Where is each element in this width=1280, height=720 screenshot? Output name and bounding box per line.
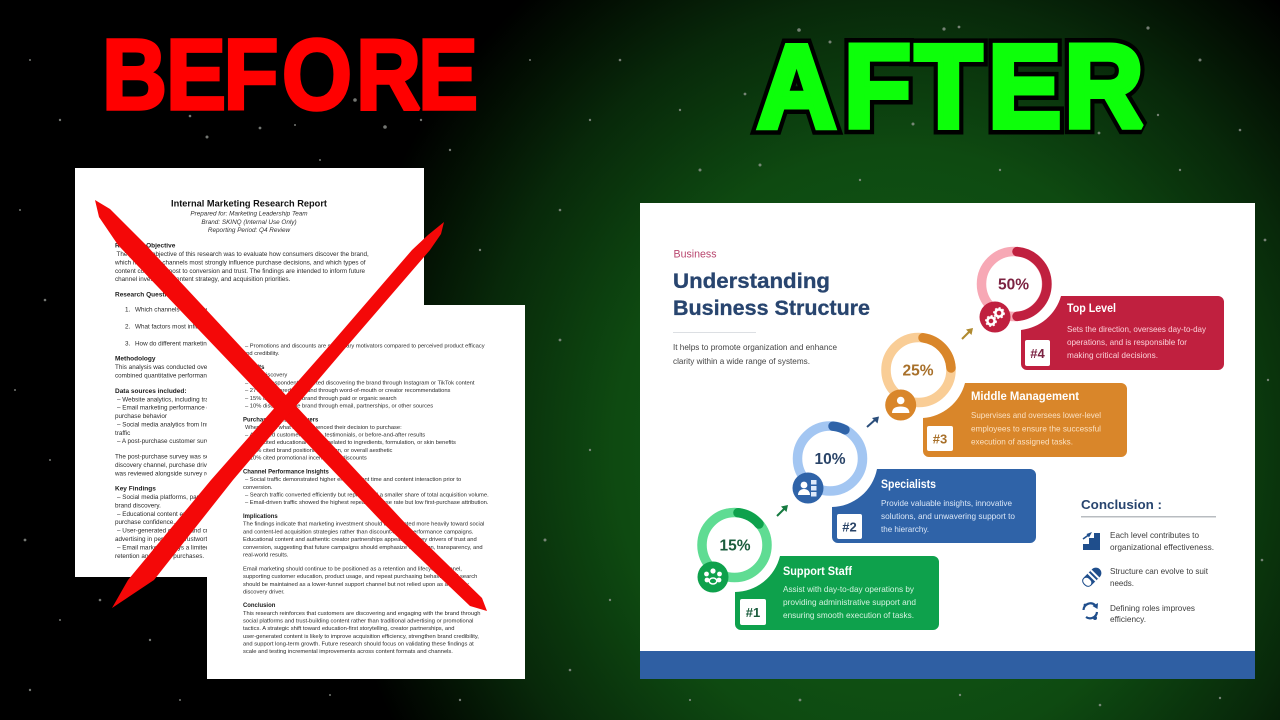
report findings text: – Social traffic demonstrated higher engagement time and content interaction prior to (245, 477, 461, 483)
percentage: 25% (902, 362, 934, 380)
conclusion heading: Conclusion : (1081, 497, 1162, 512)
rank badge (740, 599, 766, 625)
heading: AFTER: AFTER (757, 21, 1144, 153)
report objective and methodology text: advertising in perceived trustwort (115, 536, 208, 543)
heading: AFTER: AFTER (757, 21, 1144, 153)
card description (783, 584, 916, 620)
report conclusion text: scale and testing incremental improvements across content formats and channels. (243, 649, 453, 655)
ring chart (886, 338, 951, 402)
report objective and methodology text: – Educational content expe (117, 511, 194, 518)
report conclusion text (243, 603, 480, 655)
rank badge: #4 (1030, 346, 1045, 361)
card description (971, 410, 1101, 446)
report findings text: – 10% cited promotional incentives or discounts (245, 456, 367, 462)
report objective and methodology text: purchase behavior (115, 413, 167, 420)
report objective and methodology text: – Social media platforms, partic (117, 494, 205, 501)
category label: Business (674, 248, 717, 260)
report objective and methodology text: – Website analytics, including tra (117, 396, 209, 404)
card description: ensuring smooth execution of tasks. (783, 610, 914, 620)
report implications text: real-world results. (243, 552, 289, 558)
report objective and methodology text: purchase confidence. (115, 519, 175, 526)
report objective and methodology text: Key Findings (115, 486, 156, 492)
conclusion item 1 (1110, 530, 1214, 552)
report objective and methodology text: This analysis was conducted ove (115, 364, 208, 371)
report subtitle: Brand: SKINQ (Internal Use Only) (201, 219, 297, 226)
report objective and methodology text: discovery channel, purchase driv (115, 462, 208, 469)
report subtitle: Prepared for: Marketing Leadership Team (190, 210, 308, 218)
report findings text: – 32% cited educational content related to ingredients, formulation, or skin benefits (245, 440, 456, 446)
report findings text: and credibility. (243, 351, 280, 357)
icon: team (698, 562, 728, 592)
conclusion item 3: efficiency. (1110, 614, 1146, 624)
report conclusion text: This research reinforces that customers are discovering and engaging with the brand through (243, 611, 480, 617)
report objective and methodology text: retention and repeat purchases. (115, 553, 204, 560)
report findings text: – Promotions and discounts are secondary motivators compared to perceived product efficacy (245, 344, 485, 350)
report objective and methodology text: was reviewed alongside survey re (114, 470, 210, 478)
report objective and methodology text: – Email marketing plays a limited (117, 544, 210, 552)
card description: making critical decisions. (1067, 350, 1158, 360)
heading: BEFORE: BEFORE (102, 20, 478, 131)
report objective and methodology text: – A post-purchase customer surv (117, 438, 210, 445)
arrow: level 1 to 2 (777, 505, 788, 516)
card (1021, 296, 1224, 370)
card description: operations, and is responsible for (1067, 337, 1187, 347)
report objective and methodology text: combined quantitative performan (115, 372, 207, 380)
report objective and methodology text: brand discovery. (115, 502, 161, 510)
report objective and methodology text: The post-purchase survey was se (115, 454, 210, 460)
rank badge: #3 (933, 432, 947, 446)
card description: Supervises and oversees lower-level (971, 410, 1101, 420)
report objective and methodology text: – User-generated content and cr (117, 528, 208, 534)
report conclusion text: social platforms and trust-building content rather than traditional advertising or promotional (243, 618, 473, 624)
report objective and methodology text: Research Questions (115, 292, 178, 298)
card title: Top Level (1067, 303, 1116, 315)
report findings text: – 47% of respondents reported discovering the brand through Instagram or TikTok content (245, 380, 475, 386)
card title: Support Staff (783, 566, 852, 578)
report implications text: conversion, suggesting that future campaigns should emphasize education, transparency, and (243, 545, 483, 551)
icon: manager (885, 390, 916, 420)
card description: the hierarchy. (881, 524, 929, 534)
rank badge: #1 (746, 605, 760, 620)
level 4: top level (980, 252, 1224, 370)
report implications text: and content-led acquisition strategies rather than discount-driven performance campaigns. (243, 530, 474, 536)
card title: Middle Management (971, 391, 1079, 403)
ring chart (702, 512, 767, 578)
intro text: clarity within a wide range of systems. (673, 356, 810, 366)
level 2: specialists (792, 426, 1036, 543)
report objective and methodology text: Methodology (115, 356, 156, 362)
report findings text: – 17% cited brand positioning, design, or overall aesthetic (245, 448, 393, 454)
conclusion panel (1080, 497, 1216, 624)
report findings text: – 41% cited customer reviews, testimonials, or before-and-after results (245, 432, 425, 438)
report findings text: Brand Discovery (245, 372, 287, 378)
report conclusion text: user-generated content is likely to improve acquisition efficiency, strengthen brand credibility, (243, 634, 479, 640)
report implications text: Implications (243, 514, 278, 520)
report objective and methodology text: – Social media analytics from Ins (117, 422, 209, 428)
card description: execution of assigned tasks. (971, 436, 1073, 446)
report objective and methodology text: Which channels drive most (135, 306, 211, 314)
panel: report page 1 (75, 168, 424, 577)
report findings text: When asked what most influenced their decision to purchase: (245, 425, 402, 431)
card (923, 383, 1127, 457)
card description (881, 498, 1015, 534)
title (673, 270, 870, 320)
conclusion item 2 (1110, 566, 1209, 588)
report findings text: Channel Performance Insights (243, 470, 329, 476)
rank badge: #2 (842, 520, 857, 534)
level 1: support staff (698, 512, 939, 630)
report findings text: – 10% discovered the brand through email, partnerships, or other sources (245, 404, 433, 410)
report findings text: – 15% discovered the brand through paid or organic search (245, 396, 397, 402)
report objective and methodology text (114, 242, 369, 560)
icon: specialist (792, 472, 824, 504)
report objective and methodology text: How do different marketin (135, 340, 207, 348)
icon: stairs (1083, 532, 1100, 550)
report title: Internal Marketing Research Report (171, 198, 327, 208)
report objective and methodology text: channel investment, content strategy, and acquisition priorities. (115, 276, 291, 283)
card description: Provide valuable insights, innovative (881, 498, 1012, 508)
conclusion item 2: needs. (1110, 578, 1134, 588)
report findings text (243, 344, 489, 506)
conclusion item 3 (1110, 603, 1195, 624)
report findings text: – Email-driven traffic showed the highest repeat purchase rate but low first-purchase attribution. (245, 500, 489, 506)
report objective and methodology text: 3. (125, 340, 131, 348)
report implications text: discovery driver. (243, 590, 285, 596)
report objective and methodology text: 2. (125, 324, 131, 330)
ring chart (798, 426, 862, 491)
report findings text: – 27% discovered the brand through word-of-mouth or creator recommendations (245, 388, 451, 394)
report objective and methodology text: which marketing channels most strongly influence purchase decisions, and which types of (114, 260, 366, 266)
icon: cycle (1084, 603, 1098, 620)
rank badge (1025, 340, 1050, 366)
icon: gears (980, 302, 1010, 332)
conclusion item 3: Defining roles improves (1110, 603, 1195, 613)
intro text: It helps to promote organization and enhance (673, 342, 837, 352)
title: Understanding (673, 270, 830, 293)
report implications text: Email marketing should continue to be positioned as a retention and lifecycle channel, (243, 566, 462, 572)
report conclusion text: tactics. A strategic shift toward education-first storytelling, creator partnerships, and (243, 626, 455, 632)
card description: employees to ensure the successful (971, 424, 1101, 434)
conclusion item 1: organizational effectiveness. (1110, 542, 1214, 552)
report implications text: The findings indicate that marketing investment should be allocated more heavily toward social (243, 522, 484, 528)
report findings text: – Search traffic converted efficiently but represented a smaller share of total acquisition volume. (245, 492, 489, 498)
arrow: level 3 to 4 (962, 328, 973, 339)
report conclusion text: and support long-term growth. Future research should focus on validating these findings at (243, 642, 474, 648)
card (735, 556, 939, 630)
report objective and methodology text: The primary objective of this research was to evaluate how consumers discover the brand, (116, 251, 369, 258)
rank badge (927, 426, 953, 451)
report findings text: Purchase Decision Drivers (243, 418, 319, 424)
report conclusion text: Conclusion (243, 603, 276, 609)
card title: Specialists (881, 479, 936, 491)
intro text (673, 342, 837, 366)
icon: capsule (1080, 565, 1104, 589)
card description (1067, 324, 1207, 360)
panel: infographic (640, 203, 1255, 679)
report subtitle: Reporting Period: Q4 Review (208, 227, 290, 234)
report objective and methodology text: What factors most influ (135, 324, 200, 330)
report subtitle (190, 210, 308, 234)
arrow: level 2 to 3 (867, 416, 879, 427)
report objective and methodology text: content contribute most to conversion and trust. The findings are intended to inform future (115, 268, 366, 275)
conclusion item 1: Each level contributes to (1110, 530, 1199, 540)
rank badge (837, 514, 862, 539)
panel: report page 2 (207, 305, 525, 679)
report objective and methodology text: Research Objective (115, 242, 176, 250)
report objective and methodology text: – Email marketing performance d (117, 404, 210, 412)
icon: red cross (95, 200, 487, 611)
report implications text: supporting customer education, product usage, and repeat purchasing behavior, and search (243, 574, 477, 580)
level 3: middle management (885, 338, 1127, 457)
percentage: 10% (814, 451, 846, 468)
card description: Sets the direction, oversees day-to-day (1067, 324, 1207, 334)
report implications text: should be maintained as a lower-funnel support channel but not relied upon as a primary (243, 582, 469, 588)
report findings text: Results (243, 365, 265, 371)
percentage: 15% (719, 538, 751, 554)
card description: Assist with day-to-day operations by (783, 584, 915, 594)
footer band (640, 651, 1255, 679)
conclusion item 2: Structure can evolve to suit (1110, 566, 1209, 576)
percentage: 50% (998, 276, 1029, 294)
card description: providing administrative support and (783, 597, 916, 607)
report findings text: conversion. (243, 485, 273, 491)
report objective and methodology text: 1. (125, 306, 131, 314)
card description: solutions, and unwavering support to (881, 511, 1015, 521)
card (832, 469, 1036, 543)
ring chart (982, 252, 1047, 316)
report objective and methodology text: traffic (115, 430, 130, 437)
report objective and methodology text: Data sources included: (115, 388, 187, 395)
title: Business Structure (673, 297, 870, 320)
report implications text (243, 514, 484, 596)
report implications text: Educational content and authentic creator partnerships appear to be key drivers of trust and (243, 537, 477, 543)
